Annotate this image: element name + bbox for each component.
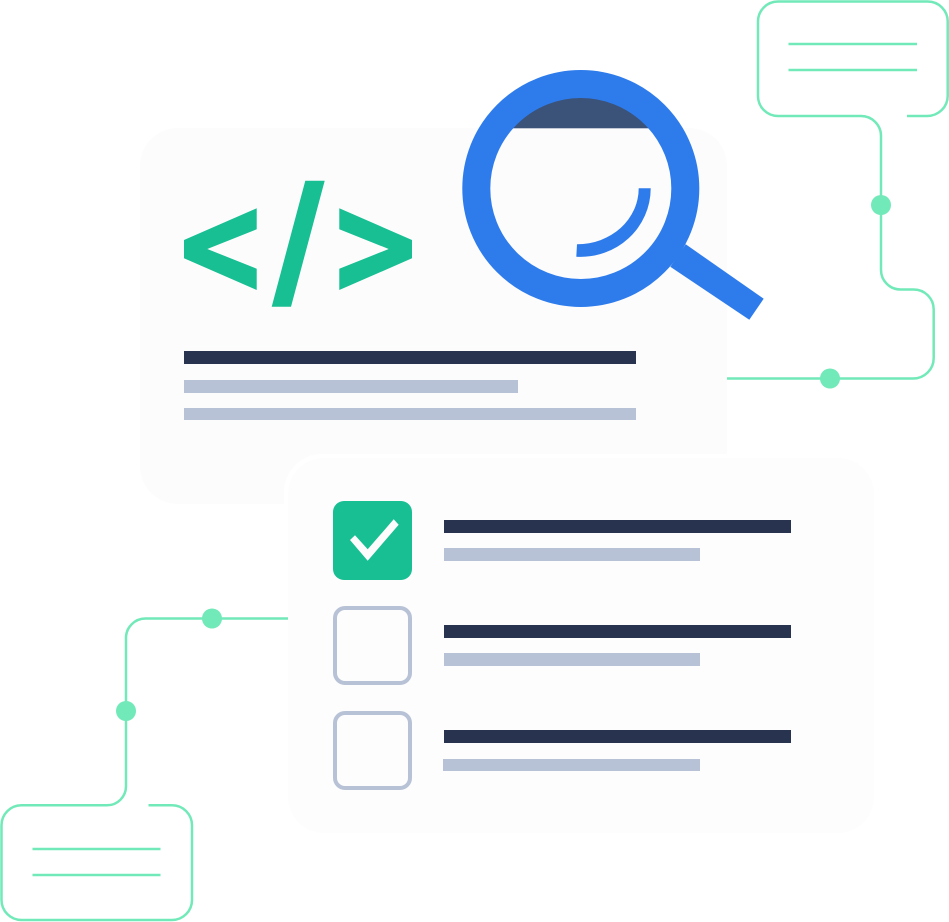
- connector: bottom-left speech box and line: [2, 608, 288, 920]
- panel: checklist card: [284, 454, 878, 837]
- checklist item 3: unchecked: [335, 713, 791, 788]
- text lines: code card: [184, 351, 636, 420]
- panel: code card: [140, 128, 727, 504]
- icon: code brackets: [184, 181, 412, 307]
- checklist item 2: unchecked: [335, 608, 791, 683]
- icon: magnifying glass: [476, 84, 764, 320]
- connector: top-right speech box and line: [727, 2, 948, 388]
- checklist item 1: checked: [333, 501, 791, 580]
